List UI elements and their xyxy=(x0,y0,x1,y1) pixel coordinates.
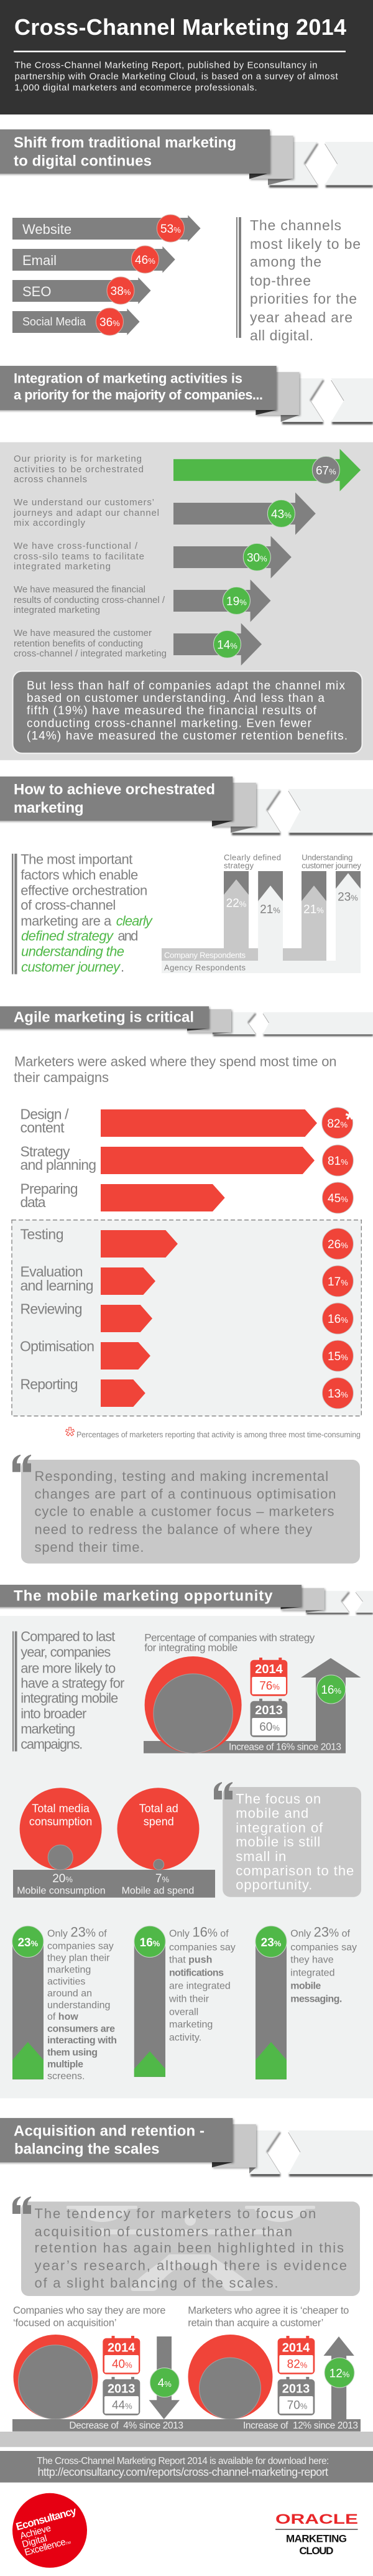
text block: compared to last year: marketing xyxy=(21,1721,75,1737)
stat column: 23% multiple screens: them using xyxy=(47,2047,98,2058)
base bar with change labels: Increase of 12% since 2013 xyxy=(243,2420,358,2431)
bar: seo: 38% xyxy=(111,285,131,298)
stat column: 16% push notifications: Only 16% of xyxy=(169,1925,229,1940)
stat column: 23% multiple screens: screens. xyxy=(47,2071,85,2081)
bar: website: Website xyxy=(22,222,71,237)
stat column: 23% mobile messaging: integrated xyxy=(290,1968,334,1979)
intro text: The Cross-Channel Marketing Report, published by Econsultancy in xyxy=(15,60,317,70)
badge: 4%: 4% xyxy=(158,2377,172,2390)
panel: integration priorities xyxy=(0,442,373,760)
logo: Econsultancy: Excellence xyxy=(24,2537,67,2558)
quote: focus on mobile: comparison to the xyxy=(236,1863,354,1878)
text block: channels: most likely to be xyxy=(250,236,361,252)
row: reviewing: 16% xyxy=(328,1313,348,1326)
row: orchestrated: activities to be orchestrated xyxy=(14,464,144,475)
bar: website: 53% xyxy=(160,223,181,236)
caption xyxy=(188,2305,349,2328)
stat column: 23% mobile messaging: they have xyxy=(290,1955,334,1966)
legend labels: Agency Respondents xyxy=(164,963,246,972)
row: preparing data: Preparing xyxy=(20,1180,78,1197)
section banner: mobile xyxy=(0,1585,373,1615)
row: design: * xyxy=(346,1106,354,1132)
calendar: 2014: 40% xyxy=(112,2358,132,2371)
caption: Companies who say they are more xyxy=(13,2305,165,2316)
icon: quote mark xyxy=(12,2196,31,2214)
stat column: 16% push notifications: are integrated xyxy=(169,1981,231,1992)
stat column: 23% multiple screens xyxy=(12,1925,117,2081)
heading xyxy=(14,2123,205,2158)
circles: 76% vs 60% xyxy=(145,1656,242,1753)
text block: channels: top-three xyxy=(250,273,311,289)
caption: retain than acquire a customer’ xyxy=(188,2317,323,2328)
stat column: 23% multiple screens: consumers are xyxy=(47,2023,115,2034)
quote: tendency for marketers: retention has again been highlighted in this xyxy=(35,2240,344,2256)
stat column: 16% push notifications: companies say xyxy=(169,1943,236,1953)
column: journey company xyxy=(302,871,326,961)
stat column: 23% multiple screens: of how xyxy=(47,2012,78,2022)
circles: 82% vs 70% xyxy=(188,2335,272,2419)
row: financial xyxy=(14,579,271,622)
heading: to digital continues xyxy=(14,152,152,169)
stat column: 23% multiple screens: activities xyxy=(47,1976,85,1987)
stat column: 23% multiple screens: around an xyxy=(47,1988,92,1999)
callout: channel mix: But less than half of companies adapt the channel mix xyxy=(27,679,346,693)
chart: focused on acquisition xyxy=(13,2305,180,2419)
heading: marketing xyxy=(14,800,83,816)
row: journeys: journeys and adapt our channel xyxy=(13,508,159,518)
stat column: 23% multiple screens: interacting with xyxy=(47,2035,117,2046)
section banner: integration xyxy=(0,366,373,424)
calendar: 2014: 76% xyxy=(259,1680,280,1693)
quote: focus on mobile xyxy=(214,1782,361,1897)
row: preparing data xyxy=(20,1180,353,1213)
row: journeys xyxy=(13,492,316,535)
calendar: 2014: 2014 xyxy=(108,2341,136,2354)
calendar: 2013: 60% xyxy=(259,1721,280,1734)
text block: important factors: effective orchestration xyxy=(21,882,147,898)
row: journeys: 43% xyxy=(271,508,292,521)
calendar: 2013 xyxy=(278,2377,315,2415)
row: journeys: We understand our customers’ xyxy=(14,497,154,508)
base bar with change labels xyxy=(12,2419,361,2432)
stat column: 23% multiple screens: 23% xyxy=(17,1936,39,1949)
labels: Mobile ad spend xyxy=(122,1885,194,1896)
column: strategy company: 22% xyxy=(226,897,247,910)
bar chart: top channels xyxy=(12,215,201,335)
legend labels xyxy=(164,950,246,972)
quote: responding and testing: Responding, testing and making incremental xyxy=(35,1468,328,1484)
row: retention: cross-channel / integrated marketing xyxy=(14,648,167,659)
stat column: 16% push notifications: marketing xyxy=(169,2019,213,2030)
row: evaluation: and learning xyxy=(20,1277,93,1294)
intro text: 1,000 digital marketers and ecommerce professionals. xyxy=(15,82,257,93)
text block: important factors: defined strategy xyxy=(21,928,114,944)
footnote xyxy=(65,1422,361,1448)
row: design: Design / xyxy=(20,1106,69,1122)
quote: focus on mobile: integration of xyxy=(236,1820,323,1836)
panel: mobile background xyxy=(0,1616,373,2098)
logo: Econsultancy: Digital xyxy=(21,2533,48,2550)
section banner: acquisition and retention xyxy=(0,2118,373,2177)
text block: channels: all digital. xyxy=(250,327,313,343)
row: preparing data: data xyxy=(20,1194,46,1210)
column: strategy company xyxy=(224,871,249,961)
text block: important factors: The most important xyxy=(21,851,132,867)
labels xyxy=(17,1872,194,1896)
circle: total media consumption: Total media xyxy=(32,1802,90,1814)
row: design xyxy=(20,1106,354,1139)
calendar: 2014 xyxy=(278,2336,315,2374)
row: orchestrated: across channels xyxy=(14,474,87,485)
quote: focus on mobile: small in xyxy=(236,1849,286,1864)
row: reporting: 13% xyxy=(328,1388,348,1401)
stat column: 23% mobile messaging: Only 23% of xyxy=(290,1925,350,1940)
row: strategy: Strategy xyxy=(20,1143,70,1159)
heading: balancing the scales xyxy=(14,2141,159,2158)
heading xyxy=(14,134,236,169)
section banner: agile xyxy=(0,1006,373,1036)
callout: channel mix: based on customer understanding. And less than a xyxy=(27,692,325,705)
stat column: 23% multiple screens: understanding xyxy=(47,2000,110,2010)
base band xyxy=(0,2432,373,2447)
text block: channels: priorities for the xyxy=(250,291,357,307)
dashed panel: optimisation activities xyxy=(12,1220,361,1416)
footnote: * xyxy=(65,1422,75,1448)
quote: responding and testing: need to redress the balance of where they xyxy=(35,1522,312,1538)
text block: important factors: marketing are a xyxy=(21,913,112,928)
heading: Agile marketing is critical xyxy=(14,1009,194,1026)
quote: tendency for marketers: acquisition of customers rather than xyxy=(35,2224,292,2239)
quote: responding and testing: cycle to enable a customer focus – marketers xyxy=(35,1504,334,1519)
circles: 40% vs 44% xyxy=(14,2335,98,2419)
footnote: Percentages of marketers reporting that activity is among three most time-consuming xyxy=(76,1430,361,1439)
calendar: 2013: 2013 xyxy=(282,2382,310,2396)
stat column: 16% push notifications: notifications xyxy=(169,1968,224,1979)
text block: important factors: of cross-channel xyxy=(21,897,116,913)
text block: compared to last year: have a strategy for xyxy=(21,1675,124,1691)
callout: channel mix: fifth (19%) have measured the financial results of xyxy=(27,704,317,717)
circle: total ad spend: spend xyxy=(144,1815,174,1827)
legend labels: Company Respondents xyxy=(164,950,246,959)
stat column: 23% multiple screens: they plan their xyxy=(47,1953,110,1964)
row: retention: retention benefits of conducting xyxy=(14,638,143,649)
logo: Oracle Marketing Cloud: CLOUD xyxy=(299,2545,333,2557)
row: design: 82% xyxy=(327,1118,348,1131)
row: strategy: and planning xyxy=(20,1157,96,1173)
row: evaluation xyxy=(20,1264,353,1297)
row: strategy: 81% xyxy=(328,1155,348,1168)
footer band: download link: http://econsultancy.com/reports/cross-channel-marketing-report xyxy=(37,2466,328,2478)
text block: channels: The channels xyxy=(250,217,341,233)
logo: Oracle Marketing Cloud: MARKETING xyxy=(286,2533,347,2545)
row: orchestrated: Our priority is for marketing xyxy=(14,454,142,464)
heading: Shift from traditional marketing xyxy=(14,134,236,151)
logo: Econsultancy: Achieve xyxy=(19,2523,52,2542)
stat column: 23% mobile messaging xyxy=(256,1925,357,2079)
row: testing: Testing xyxy=(20,1226,63,1243)
column labels: strategy xyxy=(224,861,254,870)
footer band: download link: The Cross-Channel Marketing Report 2014 is available for download here: xyxy=(37,2456,329,2466)
row: reviewing xyxy=(20,1301,353,1334)
logo: Oracle Marketing Cloud: ORACLE xyxy=(275,2511,358,2527)
text block: channels: year ahead are xyxy=(250,309,352,325)
bar: social media xyxy=(12,308,140,335)
stat column: 16% push notifications: 16% xyxy=(140,1936,160,1949)
bar chart: where marketers spend time xyxy=(20,1106,354,1409)
calendar: 2013: 44% xyxy=(112,2399,132,2412)
calendar: 2013: 2013 xyxy=(255,1704,283,1717)
text block: compared to last year: integrating mobile xyxy=(21,1691,118,1706)
heading: Acquisition and retention - xyxy=(14,2123,205,2140)
labels: 20% xyxy=(52,1872,73,1885)
intro text xyxy=(15,60,338,93)
logo: Econsultancy: TM xyxy=(65,2541,71,2546)
text block: important factors xyxy=(12,851,154,975)
caption xyxy=(13,2305,165,2328)
heading: The mobile marketing opportunity xyxy=(14,1588,273,1605)
arrow: decrease xyxy=(149,2336,180,2419)
bar: email: 46% xyxy=(135,254,155,267)
row: testing: 26% xyxy=(328,1238,348,1251)
calendar: 2014: 82% xyxy=(287,2358,308,2371)
caption: Marketers who agree it is ‘cheaper to xyxy=(188,2305,349,2316)
row: reporting: Reporting xyxy=(20,1376,78,1392)
arrow: increase xyxy=(323,2336,354,2419)
callout: channel mix: (14%) have measured the customer retention benefits. xyxy=(27,730,348,743)
text block: important factors: clearly xyxy=(116,913,154,928)
quote: focus on mobile: opportunity. xyxy=(236,1877,312,1893)
column labels xyxy=(224,853,361,870)
text block: important factors: understanding the xyxy=(21,944,124,959)
row: optimisation: Optimisation xyxy=(20,1338,94,1355)
badge: 16% xyxy=(317,1675,346,1704)
base bar xyxy=(13,1870,215,1898)
chart heading: Percentage of companies with strategy xyxy=(144,1631,315,1643)
text block: channels xyxy=(236,217,361,343)
calendar: 2014 xyxy=(251,1658,287,1696)
quote: tendency for marketers xyxy=(12,2196,360,2296)
badge: 4% xyxy=(150,2368,179,2397)
column: journey agency xyxy=(336,871,361,973)
row: optimisation xyxy=(20,1338,353,1371)
row: journeys: mix accordingly xyxy=(14,518,86,528)
calendar: 2014: 2014 xyxy=(255,1663,283,1676)
badge: 16%: 16% xyxy=(321,1684,341,1697)
arrow: increase base xyxy=(144,1658,361,1753)
quote: responding and testing xyxy=(12,1455,360,1564)
row: evaluation: Evaluation xyxy=(20,1264,83,1280)
quote: responding and testing: spend their time. xyxy=(35,1539,144,1555)
text block: important factors: . xyxy=(121,959,124,975)
row: optimisation: 15% xyxy=(328,1350,348,1363)
text block: important factors: factors which enable xyxy=(21,867,138,882)
row: orchestrated: 67% xyxy=(316,464,336,477)
row: teams: 30% xyxy=(247,551,267,564)
stat column: 16% push notifications: with their xyxy=(168,1994,210,2004)
icon: quote mark xyxy=(12,1455,31,1472)
stat column: 23% multiple screens: companies say xyxy=(47,1941,114,1952)
header panel xyxy=(0,0,373,114)
stat column: 23% multiple screens: Only 23% of xyxy=(47,1925,107,1940)
heading xyxy=(14,370,263,403)
heading: Integration of marketing activities is xyxy=(14,370,242,386)
bar: website xyxy=(12,215,201,242)
row: reviewing: Reviewing xyxy=(20,1301,82,1317)
row: retention: We have measured the customer xyxy=(14,628,152,638)
quote: responding and testing: changes are part of a continuous optimisation xyxy=(35,1486,336,1501)
chart: mobile share of media and ad spend xyxy=(13,1788,215,1898)
stat column: 23% multiple screens: marketing xyxy=(47,1965,91,1976)
logo: Econsultancy xyxy=(12,2493,87,2568)
bar: email: Email xyxy=(22,253,57,268)
quote: tendency for marketers: year’s research, although there is evidence xyxy=(35,2257,347,2273)
text block: important factors: and xyxy=(117,928,138,944)
callout: channel mix: conducting cross-channel marketing. Even fewer xyxy=(27,717,312,730)
caption: ‘focused on acquisition’ xyxy=(13,2317,117,2328)
stat column: 23% mobile messaging: messaging. xyxy=(290,1994,342,2004)
stat column: 23% mobile messaging: 23% xyxy=(261,1936,282,1949)
row: orchestrated xyxy=(14,449,361,492)
row: financial: We have measured the financial xyxy=(14,584,145,595)
section banner: shift to digital xyxy=(0,129,373,188)
footer band: download link xyxy=(0,2451,373,2483)
row: evaluation: 17% xyxy=(328,1276,348,1289)
calendar: 2014: 2014 xyxy=(282,2341,310,2354)
row: preparing data: 45% xyxy=(328,1192,348,1205)
row: teams: We have cross-functional / xyxy=(14,541,138,551)
row: teams: cross-silo teams to facilitate xyxy=(14,551,144,562)
chart: cheaper to retain xyxy=(188,2305,354,2419)
quote: tendency for marketers: of a slight balancing of the scales. xyxy=(35,2275,279,2291)
stat column: 16% push notifications: that push xyxy=(169,1955,212,1966)
calendar: 2013 xyxy=(251,1699,287,1737)
calendar: 2014 xyxy=(103,2336,140,2374)
row: retention: 14% xyxy=(217,638,237,651)
labels: Mobile consumption xyxy=(17,1885,106,1896)
chart: company vs agency respondents xyxy=(162,853,361,973)
column labels: Understanding xyxy=(302,853,352,862)
bar: email xyxy=(12,246,175,273)
base bar with change labels: Decrease of 4% since 2013 xyxy=(69,2420,183,2431)
bar: social media: Social Media xyxy=(22,315,86,328)
labels: 7% xyxy=(155,1872,170,1885)
logo: Econsultancy: Econsultancy xyxy=(15,2505,78,2533)
bar: social media: 36% xyxy=(99,316,120,329)
text block: marketers asked: Marketers were asked where they spend most time on xyxy=(14,1053,337,1069)
bar: seo xyxy=(12,277,151,304)
text block: important factors: customer journey xyxy=(21,959,121,975)
logo: Oracle Marketing Cloud xyxy=(275,2511,358,2557)
column: strategy agency xyxy=(258,871,283,973)
icon: quote mark xyxy=(214,1782,233,1799)
quote: tendency for marketers: The tendency for marketers to focus on xyxy=(35,2206,316,2221)
calendar: 2013 xyxy=(103,2377,140,2415)
column labels: Clearly defined xyxy=(224,853,281,862)
title: Cross-Channel Marketing 2014 xyxy=(14,14,346,40)
row: testing xyxy=(20,1226,353,1259)
row: teams: integrated marketing xyxy=(14,561,111,572)
calendar: 2013: 2013 xyxy=(108,2382,135,2396)
chart: mobile strategy 2014 vs 2013: Increase of 16% since 2013 xyxy=(229,1742,341,1753)
badge: 12% xyxy=(325,2358,354,2387)
icon: scales watermark xyxy=(67,2206,315,2291)
stat column: 23% mobile messaging: mobile xyxy=(290,1981,321,1992)
row: design: content xyxy=(20,1119,65,1136)
stat column: 23% mobile messaging: companies say xyxy=(290,1943,357,1953)
quote: focus on mobile: mobile and xyxy=(236,1806,308,1821)
chart: mobile strategy 2014 vs 2013 xyxy=(144,1631,361,1753)
text block: channels: among the xyxy=(250,254,321,270)
section banner: orchestrated marketing xyxy=(0,777,373,835)
text block: marketers asked: their campaigns xyxy=(14,1070,109,1085)
stat column: 16% push notifications: overall xyxy=(169,2007,198,2017)
column: journey company: 21% xyxy=(303,903,324,916)
heading: How to achieve orchestrated xyxy=(14,782,215,798)
text block: compared to last year: campaigns. xyxy=(21,1737,83,1752)
row: financial: integrated marketing xyxy=(14,605,100,615)
text block: compared to last year: into broader xyxy=(21,1706,86,1722)
intro text: partnership with Oracle Marketing Cloud, is based on a survey of almost xyxy=(15,71,338,82)
row: retention xyxy=(14,623,262,666)
row: reporting xyxy=(20,1376,353,1409)
column: journey agency: 23% xyxy=(338,890,358,903)
badge: 12%: 12% xyxy=(329,2367,350,2380)
bar: seo: SEO xyxy=(22,284,51,299)
chart heading xyxy=(144,1631,315,1653)
stat column: 23% multiple screens: multiple xyxy=(47,2059,83,2070)
text block: compared to last year xyxy=(12,1628,124,1752)
column: strategy agency: 21% xyxy=(260,903,280,916)
quote: focus on mobile: mobile is still xyxy=(236,1834,320,1850)
row: financial: results of conducting cross-channel / xyxy=(14,595,165,605)
stat column: 16% push notifications: activity. xyxy=(169,2032,201,2043)
text block: marketers asked xyxy=(14,1053,337,1085)
row: financial: 19% xyxy=(226,595,247,608)
column labels: customer journey xyxy=(302,861,361,870)
callout: channel mix xyxy=(12,671,362,754)
text block: compared to last year: are more likely to xyxy=(21,1660,116,1676)
heading: a priority for the majority of companies... xyxy=(14,387,263,403)
quote: focus on mobile: The focus on xyxy=(236,1791,321,1806)
row: teams xyxy=(14,536,292,579)
calendar: 2013: 70% xyxy=(287,2399,308,2412)
chart heading: for integrating mobile xyxy=(144,1641,237,1653)
circle: total media consumption: consumption xyxy=(29,1815,92,1827)
circle: total media consumption xyxy=(20,1788,102,1870)
circle: total ad spend: Total ad xyxy=(139,1802,178,1814)
circle: total ad spend xyxy=(117,1788,199,1870)
text block: compared to last year: year, companies xyxy=(21,1645,111,1660)
stat column: 16% push notifications xyxy=(134,1925,236,2077)
row: strategy xyxy=(20,1143,353,1176)
heading xyxy=(14,782,215,816)
text block: compared to last year: Compared to last xyxy=(21,1628,115,1644)
legend bars xyxy=(162,948,361,973)
